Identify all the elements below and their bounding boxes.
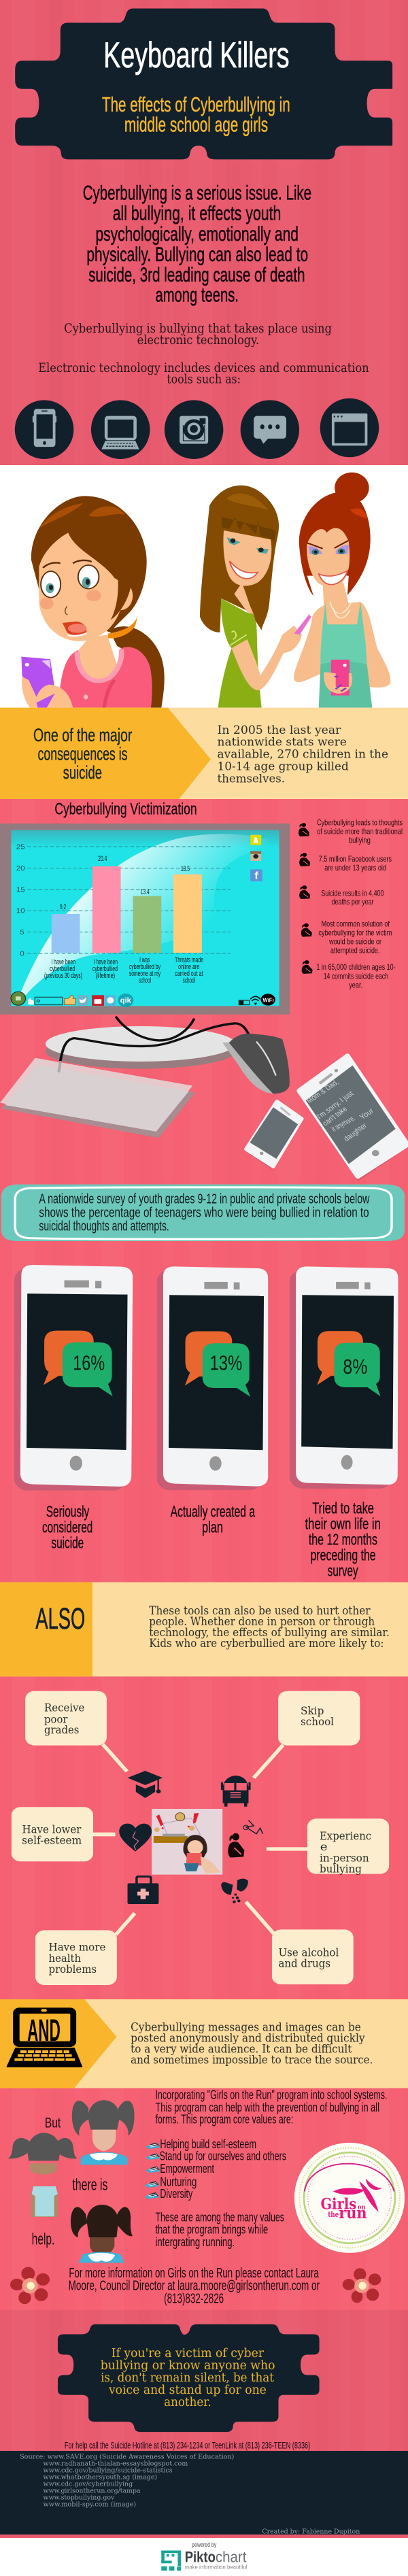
statistic text: [218, 724, 388, 785]
effect: skip school: Skip: [301, 1705, 324, 1718]
effect: in-person bullying: bullying: [320, 1863, 362, 1876]
bar chart: 20.4: [98, 855, 107, 863]
effect: lower self-esteem: Have lower: [22, 1824, 82, 1836]
phone captions: Tried to take: [312, 1500, 374, 1517]
and band: to a very wide audience. It can be difficult: [131, 2043, 352, 2056]
effect: health problems: [35, 1913, 135, 1985]
bar chart: 5: [20, 929, 24, 936]
phone: 16%: [14, 1265, 133, 1491]
bar chart: I was: [139, 955, 150, 964]
bar chart: 15: [16, 886, 25, 894]
value list: Helping build self-esteem: [160, 2137, 256, 2152]
panel: program, contact, callout, sources: [7, 2133, 405, 2571]
effect: lower self-esteem: [12, 1807, 116, 1861]
bar chart: 10: [16, 907, 25, 915]
icon: kneeling silhouette with scribble: [228, 1820, 263, 1858]
girl icon: grey pigtails: [72, 2100, 135, 2165]
bar chart: I have been: [51, 957, 75, 966]
icon: instagram: [165, 400, 223, 459]
effect: alcohol and drugs: and drugs: [278, 1958, 330, 1970]
effect: health problems: problems: [49, 1963, 97, 1976]
contact information: (813)832-2826: [164, 2291, 224, 2306]
effect: in-person bullying: Experienc: [320, 1830, 371, 1843]
logo: Girls on the Run: Girls: [320, 2196, 356, 2214]
closing callout: bullying or know anyone who: [101, 2358, 275, 2373]
value list continued: Nurturing: [160, 2175, 197, 2189]
sources: www.girlsontherun.org/tampa: [44, 2488, 141, 2495]
suicide facts list: attempted suicide.: [330, 945, 379, 955]
intro paragraph: all bullying, it effects youth: [113, 202, 281, 224]
definition text: Electronic technology includes devices and communication: [38, 361, 369, 375]
small smartphone: [244, 1101, 302, 1169]
bar chart: (previous 30 days): [44, 971, 82, 980]
bar chart: I have been: [94, 957, 118, 966]
suicide facts list: [299, 817, 403, 989]
definition text: Cyberbullying is bullying that takes place using: [64, 322, 332, 336]
panel: cyberbullying victimization: [0, 800, 408, 1181]
icon: chat bubble: [241, 400, 299, 459]
statistic text: available, 270 children in the: [218, 748, 388, 761]
intro paragraph: among teens.: [155, 284, 239, 306]
icon: flower left: [10, 2267, 50, 2304]
footer: Piktochart logo: [161, 2541, 248, 2571]
effect: alcohol and drugs: [246, 1902, 354, 1984]
logo: Girls on the Run: on: [358, 2204, 366, 2211]
intro paragraph: [83, 182, 311, 306]
phone: 8%: 8%: [343, 1355, 367, 1378]
center illustration: sad girl at laptop: [152, 1809, 222, 1875]
intro paragraph: Cyberbullying is a serious issue. Like: [83, 182, 311, 204]
bar chart: [16, 843, 231, 985]
values closing text: These are among the many values: [155, 2211, 284, 2225]
footer: Piktochart logo: chart: [216, 2548, 247, 2565]
effect: in-person bullying: in-person: [320, 1852, 369, 1865]
middle girl smiling: [200, 486, 311, 708]
bar chart: carried out at: [175, 969, 203, 978]
icon: smartphone: [15, 400, 73, 459]
logo: Girls on the Run: run: [339, 2203, 367, 2222]
closing callout: another.: [164, 2395, 211, 2409]
phone: 13%: 13%: [209, 1351, 242, 1374]
taskbar icons: [11, 992, 275, 1007]
sources: www.whatbothersyouth.sg (image): [44, 2474, 157, 2481]
cables: [58, 1017, 248, 1071]
desktop app icons: [250, 835, 262, 881]
intro paragraph: physically. Bullying can also lead to: [86, 243, 308, 265]
sources: [20, 2454, 234, 2509]
intro paragraph: psychologically, emotionally and: [95, 222, 299, 245]
desktop app icons: f: [254, 871, 259, 881]
panel: phone captions and also band: [0, 1500, 408, 1876]
panel: survey intro and phones: [1, 1185, 405, 1491]
closing callout: is, don't remain silent, be that: [101, 2371, 275, 2385]
title: Keyboard Killers: [103, 36, 290, 75]
statistic text: nationwide stats were: [218, 736, 347, 749]
sources: www.cdc.gov/cyberbullying: [44, 2481, 133, 2488]
bar chart: 0: [20, 950, 24, 957]
bar chart: 13.4: [141, 889, 150, 896]
phone captions: Seriously: [46, 1504, 90, 1521]
sources: Source: www.SAVE.org (Suicide Awareness Voices of Education): [20, 2454, 234, 2460]
bar chart: 9.2: [60, 904, 66, 911]
phone captions: [42, 1500, 381, 1580]
value list: Stand up for ourselves and others: [160, 2150, 286, 2163]
logo: Girls on the Run: [294, 2143, 405, 2253]
girl icon: tan: [7, 2133, 78, 2217]
values closing text: intergrating running.: [155, 2235, 235, 2250]
phone captions: plan: [202, 1519, 223, 1536]
closing callout: voice and stand up for one: [108, 2383, 267, 2397]
program description: [155, 2088, 387, 2126]
icon: laptop with AND: [7, 2007, 82, 2067]
icon: browser window: [320, 399, 379, 457]
phone captions: suicide: [51, 1535, 84, 1552]
suicide facts list: year.: [349, 980, 362, 989]
effect: skip school: [254, 1691, 360, 1778]
intro paragraph: suicide, 3rd leading cause of death: [88, 263, 305, 286]
closing callout: [58, 2324, 320, 2432]
value list continued: [145, 2175, 197, 2201]
taskbar icons: qik: [120, 997, 131, 1004]
large smartphone with note: it anymore.: [330, 1115, 357, 1133]
right girl smiling: [294, 473, 390, 708]
arrow label: One of the major: [33, 726, 133, 745]
effect: poor grades: Receive: [44, 1702, 84, 1714]
sources: www.stopbullying.gov: [44, 2494, 115, 2501]
footer: Piktochart logo: Pikto: [185, 2548, 216, 2565]
icon: laptop: [91, 400, 150, 459]
monitor frame: [0, 824, 290, 1015]
value list: [146, 2137, 286, 2176]
bar chart: cyberbullied by: [129, 962, 160, 971]
chart heading: Cyberbullying Victimization: [54, 800, 197, 818]
also band: ALSO: [35, 1602, 85, 1636]
icon: laptop with AND: AND: [27, 2014, 61, 2048]
also band: [0, 1582, 408, 1676]
sources: www.mobil-spy.com (image): [44, 2501, 136, 2509]
bar chart: Threats made: [175, 955, 203, 964]
definition text: tools such as:: [167, 372, 241, 387]
text: But: But: [45, 2114, 61, 2131]
contact information: [69, 2265, 320, 2306]
arrow label: suicide: [63, 763, 102, 783]
phone captions: survey: [328, 1563, 358, 1580]
effect: in-person bullying: [267, 1818, 389, 1876]
effect: poor grades: poor: [44, 1713, 68, 1726]
footer: Piktochart logo: powered by: [192, 2541, 216, 2548]
suicide facts list: deaths per year: [332, 897, 374, 906]
keyboard: [0, 1058, 195, 1138]
footer: Piktochart logo: make information beautiful: [185, 2564, 248, 2570]
large smartphone with note: [298, 1056, 408, 1181]
icon: graduation cap: [128, 1771, 163, 1798]
effect: poor grades: grades: [44, 1724, 79, 1737]
effect: poor grades: [25, 1691, 127, 1772]
panel: header: [15, 8, 392, 459]
text: there is help: there is: [72, 2176, 107, 2194]
survey callout: suicidal thoughts and attempts.: [39, 1219, 169, 1234]
suicide facts list: bullying: [349, 835, 371, 845]
bar chart: someone at my: [129, 969, 160, 978]
bar chart: 20: [16, 865, 25, 872]
values closing text: that the program brings while: [155, 2223, 268, 2237]
bar chart: cyberbullied: [50, 964, 75, 973]
arrow label: [0, 708, 211, 799]
bar chart: school: [139, 976, 151, 985]
large smartphone with note: can't take: [321, 1106, 349, 1128]
large smartphone with note: Mom & Dad,: [305, 1079, 341, 1105]
icon: broken heart: [119, 1824, 152, 1852]
bar chart: 18.5: [181, 866, 190, 873]
left girl looking at phone: [21, 496, 165, 708]
closing callout: If you're a victim of cyber: [112, 2346, 265, 2360]
phone captions: Actually created a: [171, 1504, 255, 1521]
effect: in-person bullying: e: [320, 1841, 328, 1854]
effect: health problems: health: [49, 1952, 81, 1965]
effect: lower self-esteem: self-esteem: [22, 1835, 82, 1847]
credit: Created by: Fabienne Dupiton: [262, 2528, 360, 2536]
effect: health problems: Have more: [49, 1941, 105, 1954]
icon: school bus: [221, 1776, 251, 1807]
panel: suicide consequence band: [0, 708, 408, 799]
survey callout: [1, 1185, 405, 1241]
large smartphone with note: Your: [358, 1107, 375, 1121]
definition text: [38, 322, 369, 387]
monitor stand disc: [46, 1026, 235, 1069]
phone: 16%: 16%: [73, 1351, 105, 1374]
logo: Girls on the Run: the: [328, 2209, 339, 2219]
arrow label: consequences is: [37, 744, 128, 764]
values closing text: [155, 2211, 284, 2250]
bar chart: cyberbullied: [92, 964, 118, 973]
phone captions: considered: [42, 1519, 92, 1536]
phone: 8%: [290, 1266, 398, 1489]
statistic text: In 2005 the last year: [218, 724, 341, 737]
panel: girls illustration: [21, 473, 390, 708]
statistic text: themselves.: [218, 772, 285, 785]
panel: remaining effects and and-band: [0, 1876, 408, 2176]
bar chart: 25: [16, 843, 25, 851]
sources: www.radhanath-thialan-essaysblogspot.com: [44, 2460, 188, 2468]
computer mouse: [222, 1034, 290, 1094]
bar chart: (lifetime): [96, 971, 115, 980]
phone: 13%: [157, 1266, 268, 1490]
sources: www.cdc.gov/bullying/suicide-statistics: [44, 2467, 173, 2475]
subtitle: [102, 92, 290, 136]
definition text: electronic technology.: [137, 333, 259, 348]
title banner shape: [15, 8, 392, 159]
program description: forms. This program core values are:: [155, 2113, 293, 2126]
icon: medical kit: [128, 1876, 158, 1904]
effect: alcohol and drugs: Use alcohol: [278, 1947, 339, 1959]
icon: pills: [221, 1879, 248, 1903]
icon: flower right: [343, 2268, 381, 2303]
text: there is help: help.: [32, 2231, 54, 2248]
value list: Empowerment: [160, 2162, 214, 2176]
taskbar icons: WiFi: [263, 997, 274, 1003]
and band: [0, 1999, 408, 2088]
bar chart: school: [183, 976, 195, 985]
text: there is help: [32, 2176, 107, 2248]
statistic text: 10-14 age group killed: [218, 760, 349, 773]
subtitle: middle school age girls: [124, 112, 268, 136]
value list continued: Diversity: [160, 2187, 193, 2201]
large smartphone with note: I'm sorry, I just: [316, 1089, 356, 1121]
girl icon: dark hair: [71, 2205, 133, 2263]
effect: skip school: school: [301, 1716, 334, 1729]
bar chart: online are: [178, 962, 199, 971]
large smartphone with note: daughter: [343, 1122, 369, 1143]
subtitle: The effects of Cyberbullying in: [102, 92, 290, 116]
